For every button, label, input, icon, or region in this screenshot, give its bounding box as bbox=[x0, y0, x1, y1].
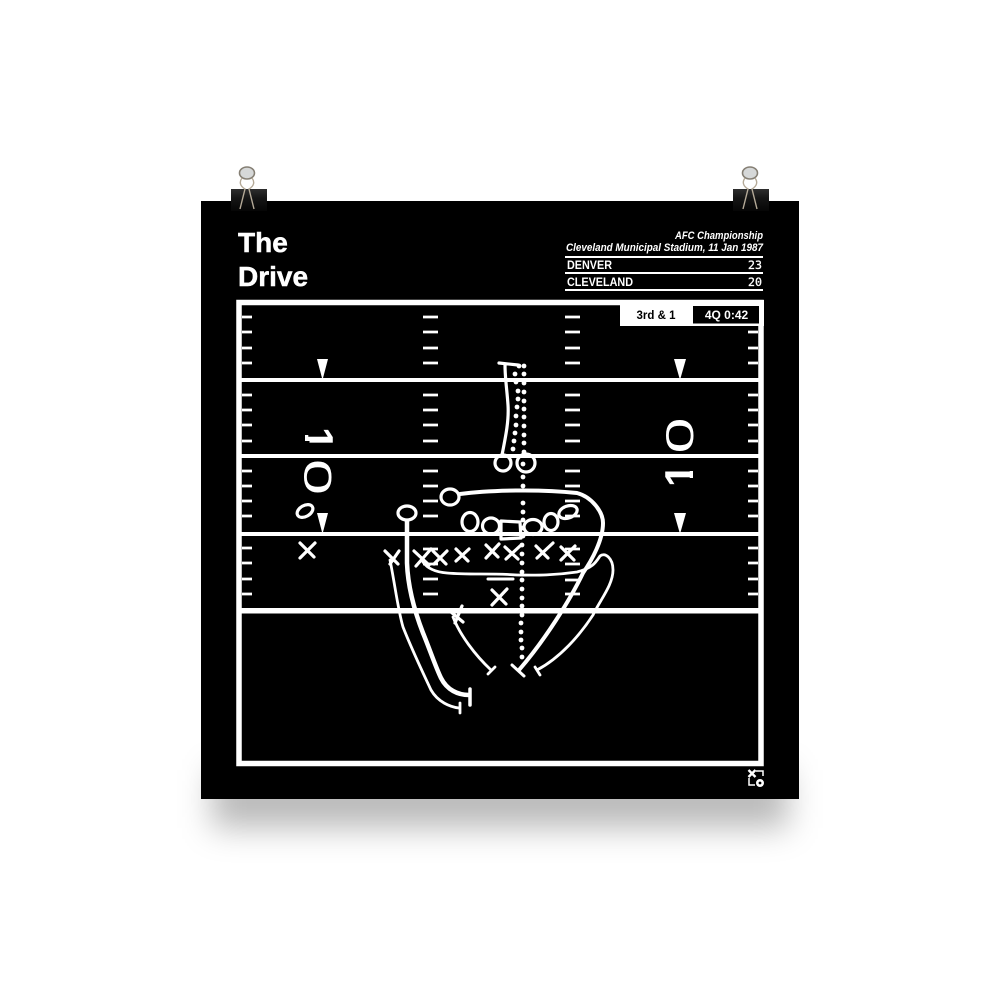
top receiver route bbox=[499, 363, 518, 455]
title: The bbox=[238, 227, 288, 258]
down and distance tag: 4Q 0:42 bbox=[705, 308, 749, 322]
yard lines bbox=[240, 378, 760, 614]
field border bbox=[239, 302, 761, 764]
game info: AFC Championship bbox=[674, 230, 763, 242]
yard number right: 0 bbox=[659, 417, 702, 453]
defense crosses bbox=[300, 543, 575, 623]
scoreboard: 23 bbox=[748, 258, 762, 272]
middle route bbox=[453, 617, 495, 674]
defender bar bbox=[488, 578, 513, 580]
poster drop shadow bbox=[212, 770, 788, 828]
end of crossing route bbox=[512, 665, 524, 676]
poster background bbox=[201, 201, 799, 799]
football field bbox=[239, 300, 764, 764]
scoreboard: 20 bbox=[748, 275, 762, 289]
yard number left: 1 bbox=[295, 427, 342, 450]
yard number right bbox=[656, 417, 703, 491]
play diagram bbox=[295, 363, 613, 713]
wide left route bbox=[407, 521, 469, 695]
crossing route to the right bbox=[460, 490, 603, 670]
flat route right bbox=[423, 555, 613, 675]
scoreboard: CLEVELAND bbox=[567, 275, 633, 289]
down and distance tag bbox=[620, 300, 764, 326]
game info bbox=[566, 230, 764, 254]
yard number left: 0 bbox=[296, 459, 339, 495]
far left route bbox=[390, 560, 460, 713]
scoreboard: DENVER bbox=[567, 258, 612, 272]
end of wide left route bbox=[468, 689, 472, 705]
direction arrows bbox=[317, 359, 686, 534]
game info: Cleveland Municipal Stadium, 11 Jan 1987 bbox=[566, 242, 764, 254]
title: Drive bbox=[238, 261, 308, 292]
binder clip left bbox=[231, 167, 267, 211]
motion dots bbox=[511, 364, 526, 659]
binder clip right bbox=[733, 167, 769, 211]
yard number left bbox=[295, 420, 342, 495]
hash marks bbox=[242, 317, 758, 594]
title bbox=[238, 227, 308, 292]
scoreboard bbox=[565, 256, 763, 291]
brand logo bbox=[748, 770, 763, 786]
offense circles bbox=[295, 454, 579, 539]
yard number right: 1 bbox=[656, 464, 703, 487]
down and distance tag: 3rd & 1 bbox=[636, 310, 676, 322]
